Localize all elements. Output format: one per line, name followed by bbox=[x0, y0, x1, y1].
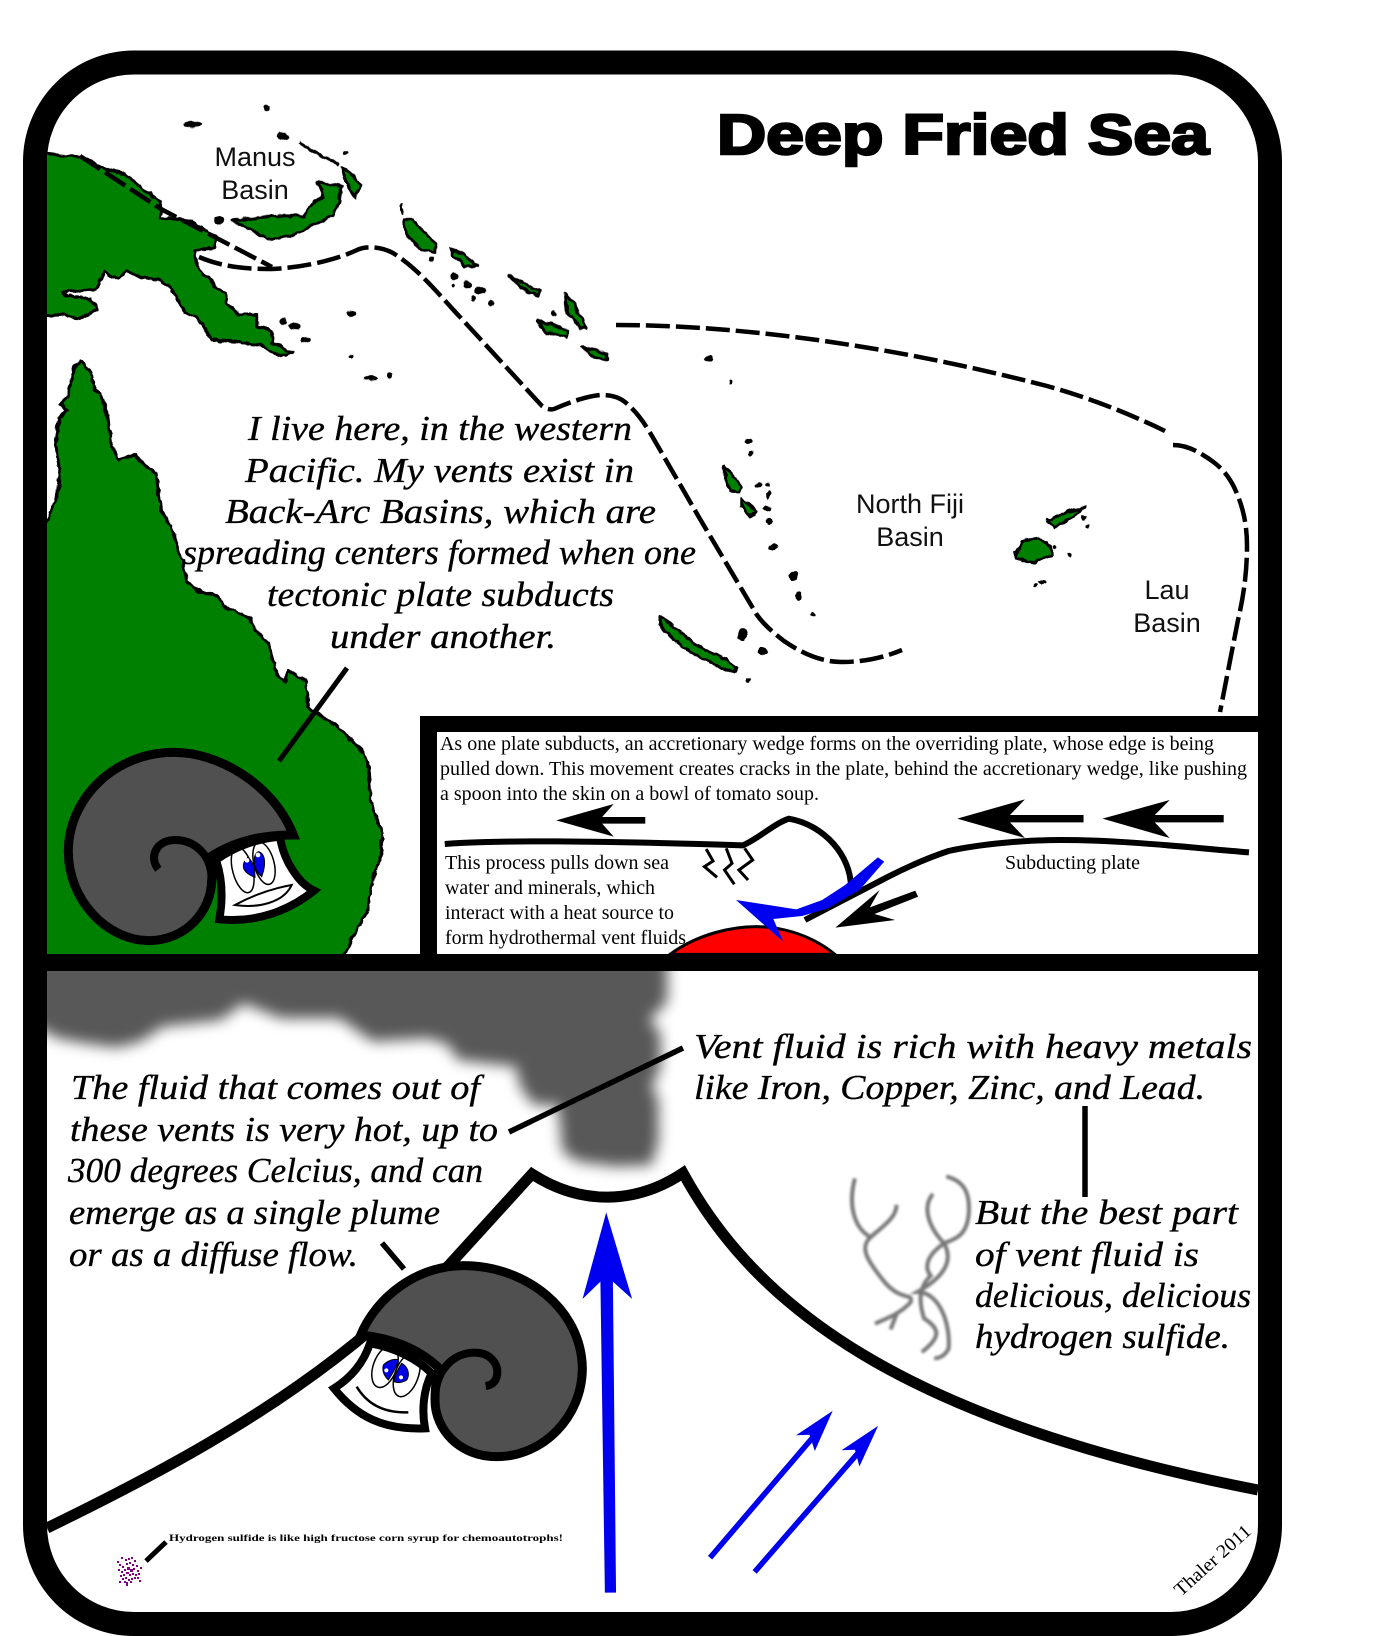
map label: Lau Basin bbox=[1135, 580, 1199, 632]
callout: snail explains location: tectonic plate subducts bbox=[267, 575, 614, 614]
text: accretionary wedge explanation: As one plate subducts, an accretionary wedge forms on the overriding plate, whose edge is being bbox=[440, 733, 1214, 755]
arrow: plate sinking bbox=[835, 890, 918, 928]
callout: hydrogen sulfide: delicious, delicious bbox=[975, 1276, 1251, 1315]
text: accretionary wedge explanation: pulled down. This movement creates cracks in the plate, behind the accretionary wedge, like pushing bbox=[440, 758, 1247, 780]
map label: Manus Basin: Basin bbox=[221, 175, 289, 205]
title: Deep Fried Sea bbox=[717, 103, 1211, 167]
land: New Guinea bbox=[36, 154, 292, 356]
subducting plate line bbox=[805, 840, 1249, 920]
arrow: subducting plate motion 2 bbox=[1102, 800, 1224, 838]
map label: North Fiji Basin: North Fiji bbox=[856, 489, 964, 519]
map label: Lau Basin: Basin bbox=[1133, 608, 1201, 638]
arrow: large blue upwelling bbox=[583, 1212, 632, 1593]
arrow: blue diffuse flow 1 bbox=[710, 1411, 833, 1558]
text: chemoautotroph note: Hydrogen sulfide is like high fructose corn syrup for chemoautotrophs! bbox=[169, 1533, 563, 1543]
islands: Melanesia west bbox=[184, 105, 607, 381]
label: subducting plate: Subducting plate bbox=[1005, 852, 1140, 874]
callout: snail explains location: I live here, in the western bbox=[247, 409, 632, 448]
text: process explanation: water and minerals, which bbox=[445, 877, 655, 899]
callout: snail explains location: spreading centers formed when one bbox=[183, 533, 696, 572]
plume of vent fluid bbox=[27, 957, 667, 1167]
cracks bbox=[704, 848, 753, 884]
callout: hydrogen sulfide: of vent fluid is bbox=[975, 1235, 1199, 1274]
icon: purple microbes bbox=[117, 1557, 142, 1586]
callout: snail explains location: Pacific. My vents exist in bbox=[244, 451, 634, 490]
icon: snail character on the vent bbox=[334, 1266, 582, 1457]
callout: vent fluid temperature: these vents is very hot, up to bbox=[70, 1110, 498, 1149]
icon: snail character on the map bbox=[68, 752, 314, 941]
callout: snail explains location: Back-Arc Basins, which are bbox=[225, 492, 656, 531]
callout: vent fluid temperature: or as a diffuse flow. bbox=[69, 1235, 358, 1274]
hydrogen sulfide wisps bbox=[852, 1176, 969, 1358]
pointer to microbes bbox=[146, 1542, 166, 1561]
callout: hydrogen sulfide bbox=[975, 1193, 1251, 1356]
islands: Vanuatu and Fiji bbox=[705, 356, 1088, 682]
subduction panel background and border bbox=[420, 716, 1258, 954]
callout: vent fluid temperature: emerge as a single plume bbox=[69, 1193, 440, 1232]
text: signature: Thaler 2011 bbox=[1170, 1521, 1256, 1601]
panel: map of the western Pacific bbox=[36, 105, 1247, 960]
text: process explanation: This process pulls down sea bbox=[445, 852, 669, 874]
map label: Lau Basin: Lau bbox=[1144, 575, 1190, 605]
overriding plate and accretionary wedge bbox=[445, 819, 851, 887]
map label: North Fiji Basin bbox=[858, 494, 962, 546]
text: accretionary wedge explanation: a spoon into the skin on a bowl of tomato soup. bbox=[440, 783, 819, 805]
island: New Caledonia bbox=[660, 617, 737, 672]
text: accretionary wedge explanation bbox=[440, 733, 1247, 805]
callout: hydrogen sulfide: hydrogen sulfide. bbox=[975, 1317, 1230, 1356]
callout: vent fluid temperature bbox=[67, 1068, 498, 1274]
arrow: blue water flow bbox=[736, 857, 884, 942]
map label: North Fiji Basin: Basin bbox=[876, 522, 944, 552]
land: Australia bbox=[38, 360, 382, 960]
panel: subduction diagram bbox=[420, 716, 1258, 954]
callout pointer line bbox=[279, 668, 347, 761]
callout: snail explains location bbox=[183, 409, 696, 656]
arrow: blue diffuse flow 2 bbox=[755, 1426, 878, 1572]
text: process explanation bbox=[445, 852, 686, 949]
callout: hydrogen sulfide: But the best part bbox=[975, 1193, 1239, 1232]
map label: Manus Basin bbox=[216, 148, 294, 200]
heat source: red bump bbox=[670, 927, 835, 954]
divider between panels bbox=[47, 954, 1258, 971]
callout: heavy metals bbox=[694, 1027, 1252, 1107]
map label: Manus Basin: Manus bbox=[214, 142, 296, 172]
callout: heavy metals: Vent fluid is rich with heavy metals bbox=[694, 1027, 1252, 1066]
callout: vent fluid temperature: 300 degrees Celcius, and can bbox=[67, 1151, 483, 1190]
callout: snail explains location: under another. bbox=[330, 617, 556, 656]
callout: heavy metals: like Iron, Copper, Zinc, and Lead. bbox=[694, 1068, 1205, 1107]
text: process explanation: form hydrothermal vent fluids bbox=[445, 927, 686, 949]
arrow: subducting plate motion 1 bbox=[957, 799, 1084, 838]
diagram: plates, wedge, heat source and arrows bbox=[445, 799, 1249, 954]
panel: hydrothermal vent bbox=[27, 954, 1258, 1601]
land masses with rough coastlines bbox=[36, 105, 1088, 960]
callout: vent fluid temperature: The fluid that comes out of bbox=[71, 1068, 485, 1107]
text: process explanation: interact with a heat source to bbox=[445, 902, 674, 924]
volcano outline bbox=[47, 1173, 1258, 1528]
plate boundaries: dashed trenches bbox=[80, 156, 1247, 712]
pointer lines bbox=[382, 1048, 1085, 1269]
arrow: overriding plate motion bbox=[556, 804, 645, 837]
